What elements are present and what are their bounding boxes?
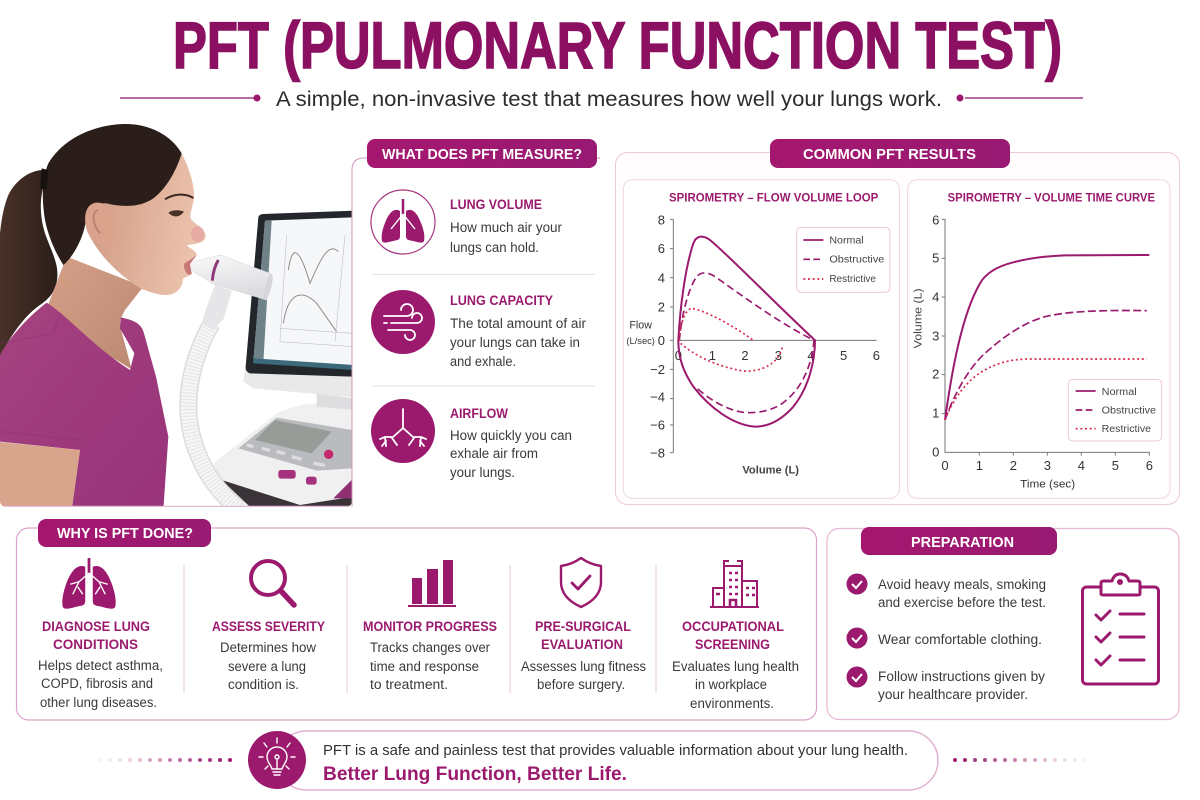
chart: flow volume loop: 8 [658,212,665,227]
item: pre-surgical evaluation: PRE-SURGICAL [535,619,631,634]
chart: volume time curve [908,180,1170,498]
chart: volume time curve: 0 [932,444,939,459]
preparation list [878,577,1046,702]
chart: flow volume loop: Restrictive [829,274,876,285]
section heading pill: PREPARATION [911,534,1014,551]
arm [0,442,80,510]
chart: flow volume loop: (L/sec) [626,336,655,346]
text: airflow: AIRFLOW [450,406,508,421]
icon: wind [371,290,435,354]
panel: why is PFT done [16,519,816,720]
panel: what does PFT measure [352,139,600,507]
item: monitor progress: MONITOR PROGRESS [363,619,497,634]
section heading pill [861,527,1057,555]
item: monitor progress [363,560,497,692]
chart: flow volume loop: 2 [741,348,749,363]
chart: flow volume loop: 0 [675,348,682,363]
check icons [846,574,868,688]
text: lung volume: How much air your [450,220,562,235]
chart: flow volume loop: 6 [873,348,880,363]
face [87,153,206,295]
eye and brow [165,195,193,199]
chart: flow volume loop: Normal [829,235,864,246]
item: diagnose lung conditions: other lung diseases. [40,695,157,710]
chart: volume time curve: Restrictive [1102,424,1151,435]
item: monitor progress: Tracks changes over [370,640,490,655]
callout: safety message: PFT is a safe and painless test that provides valuable information about your lung health. [323,742,908,759]
section heading pill [770,139,1010,168]
text: airflow: your lungs. [450,465,515,480]
section heading pill [38,519,211,547]
subtitle with decorative rules: A simple, non-invasive test that measures how well your lungs work. [276,87,942,111]
chart: flow volume loop: Flow [629,319,652,331]
chart: flow volume loop: −6 [650,417,665,432]
preparation list: and exercise before the test. [878,595,1046,610]
monitor [243,370,353,397]
text: lung capacity: The total amount of air [450,316,587,331]
cart base [213,403,353,507]
chart: volume time curve: 6 [1146,458,1153,473]
chart: flow volume loop: 6 [658,241,665,256]
chart: volume time curve: 4 [932,289,939,304]
ponytail [0,170,57,360]
chart: volume time curve: 1 [932,406,939,421]
chart: volume time curve: 1 [976,458,983,473]
photo: woman performing spirometry [0,120,353,510]
item: assess severity [212,561,325,692]
text: lung capacity: your lungs can take in [450,335,580,350]
chart: volume time curve: SPIROMETRY – VOLUME TIME CURVE [948,191,1155,205]
item: occupational screening: OCCUPATIONAL [682,619,784,634]
callout: safety message: Better Lung Function, Better Life. [323,764,627,785]
mouthpiece [202,285,232,330]
chart: flow volume loop: 4 [658,270,665,285]
icon: clipboard checklist [1082,574,1158,684]
preparation list: your healthcare provider. [878,687,1028,702]
decorative dot trails [98,758,1087,762]
base dark edge [224,480,352,507]
text: airflow [450,406,572,480]
obstructive curve [945,310,1147,420]
item: pre-surgical evaluation: before surgery. [537,677,625,692]
item: occupational screening: environments. [690,696,774,711]
text: lung capacity [450,293,587,369]
subtitle with decorative rules [120,87,1083,111]
chart: flow volume loop: −4 [650,390,665,405]
chart: flow volume loop: −8 [650,445,665,460]
text: lung volume [450,197,562,255]
neck [48,257,143,369]
item: assess severity: condition is. [228,677,299,692]
chart: volume time curve: 3 [1044,458,1051,473]
icon: bronchial tree [371,399,435,463]
callout: safety message [98,731,1087,790]
section heading pill: WHY IS PFT DONE? [57,525,193,542]
icon: bar chart [408,560,456,607]
chart: flow volume loop: 1 [709,348,716,363]
chart: volume time curve: 2 [1010,458,1017,473]
item: diagnose lung conditions: COPD, fibrosis and [41,676,153,691]
item: occupational screening: Evaluates lung health [672,659,799,674]
item: assess severity: severe a lung [228,659,306,674]
preparation list: Follow instructions given by [878,669,1045,684]
panel: preparation [827,527,1179,720]
item: pre-surgical evaluation: Assesses lung fitness [521,659,646,674]
chart: flow volume loop: 3 [775,348,782,363]
chart: volume time curve: 3 [932,328,939,343]
chart: volume time curve: 4 [1078,458,1085,473]
icon: buildings [710,561,759,607]
icon: lungs [62,558,116,609]
text: airflow: How quickly you can [450,428,572,443]
item: monitor progress: time and response [370,659,479,674]
hair [43,124,182,265]
section heading pill [367,139,597,168]
chart: flow volume loop: 5 [840,348,847,363]
normal curve [945,255,1149,420]
chart: volume time curve: 5 [932,251,939,266]
preparation list: Wear comfortable clothing. [878,632,1042,647]
chart: flow volume loop: 0 [658,333,665,348]
chart: flow volume loop: 2 [658,300,665,315]
chart: flow volume loop: Obstructive [829,255,885,266]
text: lung volume: LUNG VOLUME [450,197,542,212]
item: diagnose lung conditions [38,558,163,710]
chart: volume time curve: Volume (L) [913,288,925,348]
item: assess severity: Determines how [220,640,316,655]
chart: volume time curve: Normal [1102,387,1137,398]
item: pre-surgical evaluation [521,558,646,692]
preparation list: Avoid heavy meals, smoking [878,577,1046,592]
chart: volume time curve: 2 [932,367,939,382]
restrictive curve [679,308,782,371]
chart: volume time curve: 6 [932,212,939,227]
item: pre-surgical evaluation: EVALUATION [541,637,623,652]
icon: shield [561,558,601,607]
shirt [0,303,168,510]
item: occupational screening: SCREENING [695,637,770,652]
chart: volume time curve: 5 [1112,458,1119,473]
chart: volume time curve: Obstructive [1102,405,1156,416]
chart: volume time curve: 0 [941,458,949,473]
item: diagnose lung conditions: CONDITIONS [53,637,138,652]
text: airflow: exhale air from [450,446,538,461]
icon: lightbulb [248,731,306,789]
text: lung capacity: LUNG CAPACITY [450,293,553,308]
chart: volume time curve: Time (sec) [1020,478,1075,490]
obstructive curve [679,273,814,413]
hose [188,323,238,508]
item: diagnose lung conditions: Helps detect asthma, [38,658,163,673]
ear [85,202,102,234]
chart: flow volume loop: Volume (L) [742,464,799,476]
icon: magnifier [251,561,294,605]
text: lung capacity: and exhale. [450,354,516,369]
section heading pill: WHAT DOES PFT MEASURE? [382,146,582,163]
keypad [238,418,352,471]
section heading pill: COMMON PFT RESULTS [803,146,976,163]
icon: lungs in outline circle [371,190,435,254]
restrictive curve [945,359,1147,420]
item: occupational screening [672,561,799,711]
text: lung volume: lungs can hold. [450,240,539,255]
item: diagnose lung conditions: DIAGNOSE LUNG [42,619,150,634]
item: assess severity: ASSESS SEVERITY [212,619,325,634]
chart: flow volume loop: 4 [807,348,815,363]
chart: flow volume loop: SPIROMETRY – FLOW VOLUME LOOP [669,191,878,205]
chart: flow volume loop [623,180,899,498]
normal curve [678,237,815,427]
chart: flow volume loop: −2 [650,362,665,377]
item: monitor progress: to treatment. [370,677,448,692]
panel: common PFT results [616,139,1180,504]
item: occupational screening: in workplace [695,677,767,692]
